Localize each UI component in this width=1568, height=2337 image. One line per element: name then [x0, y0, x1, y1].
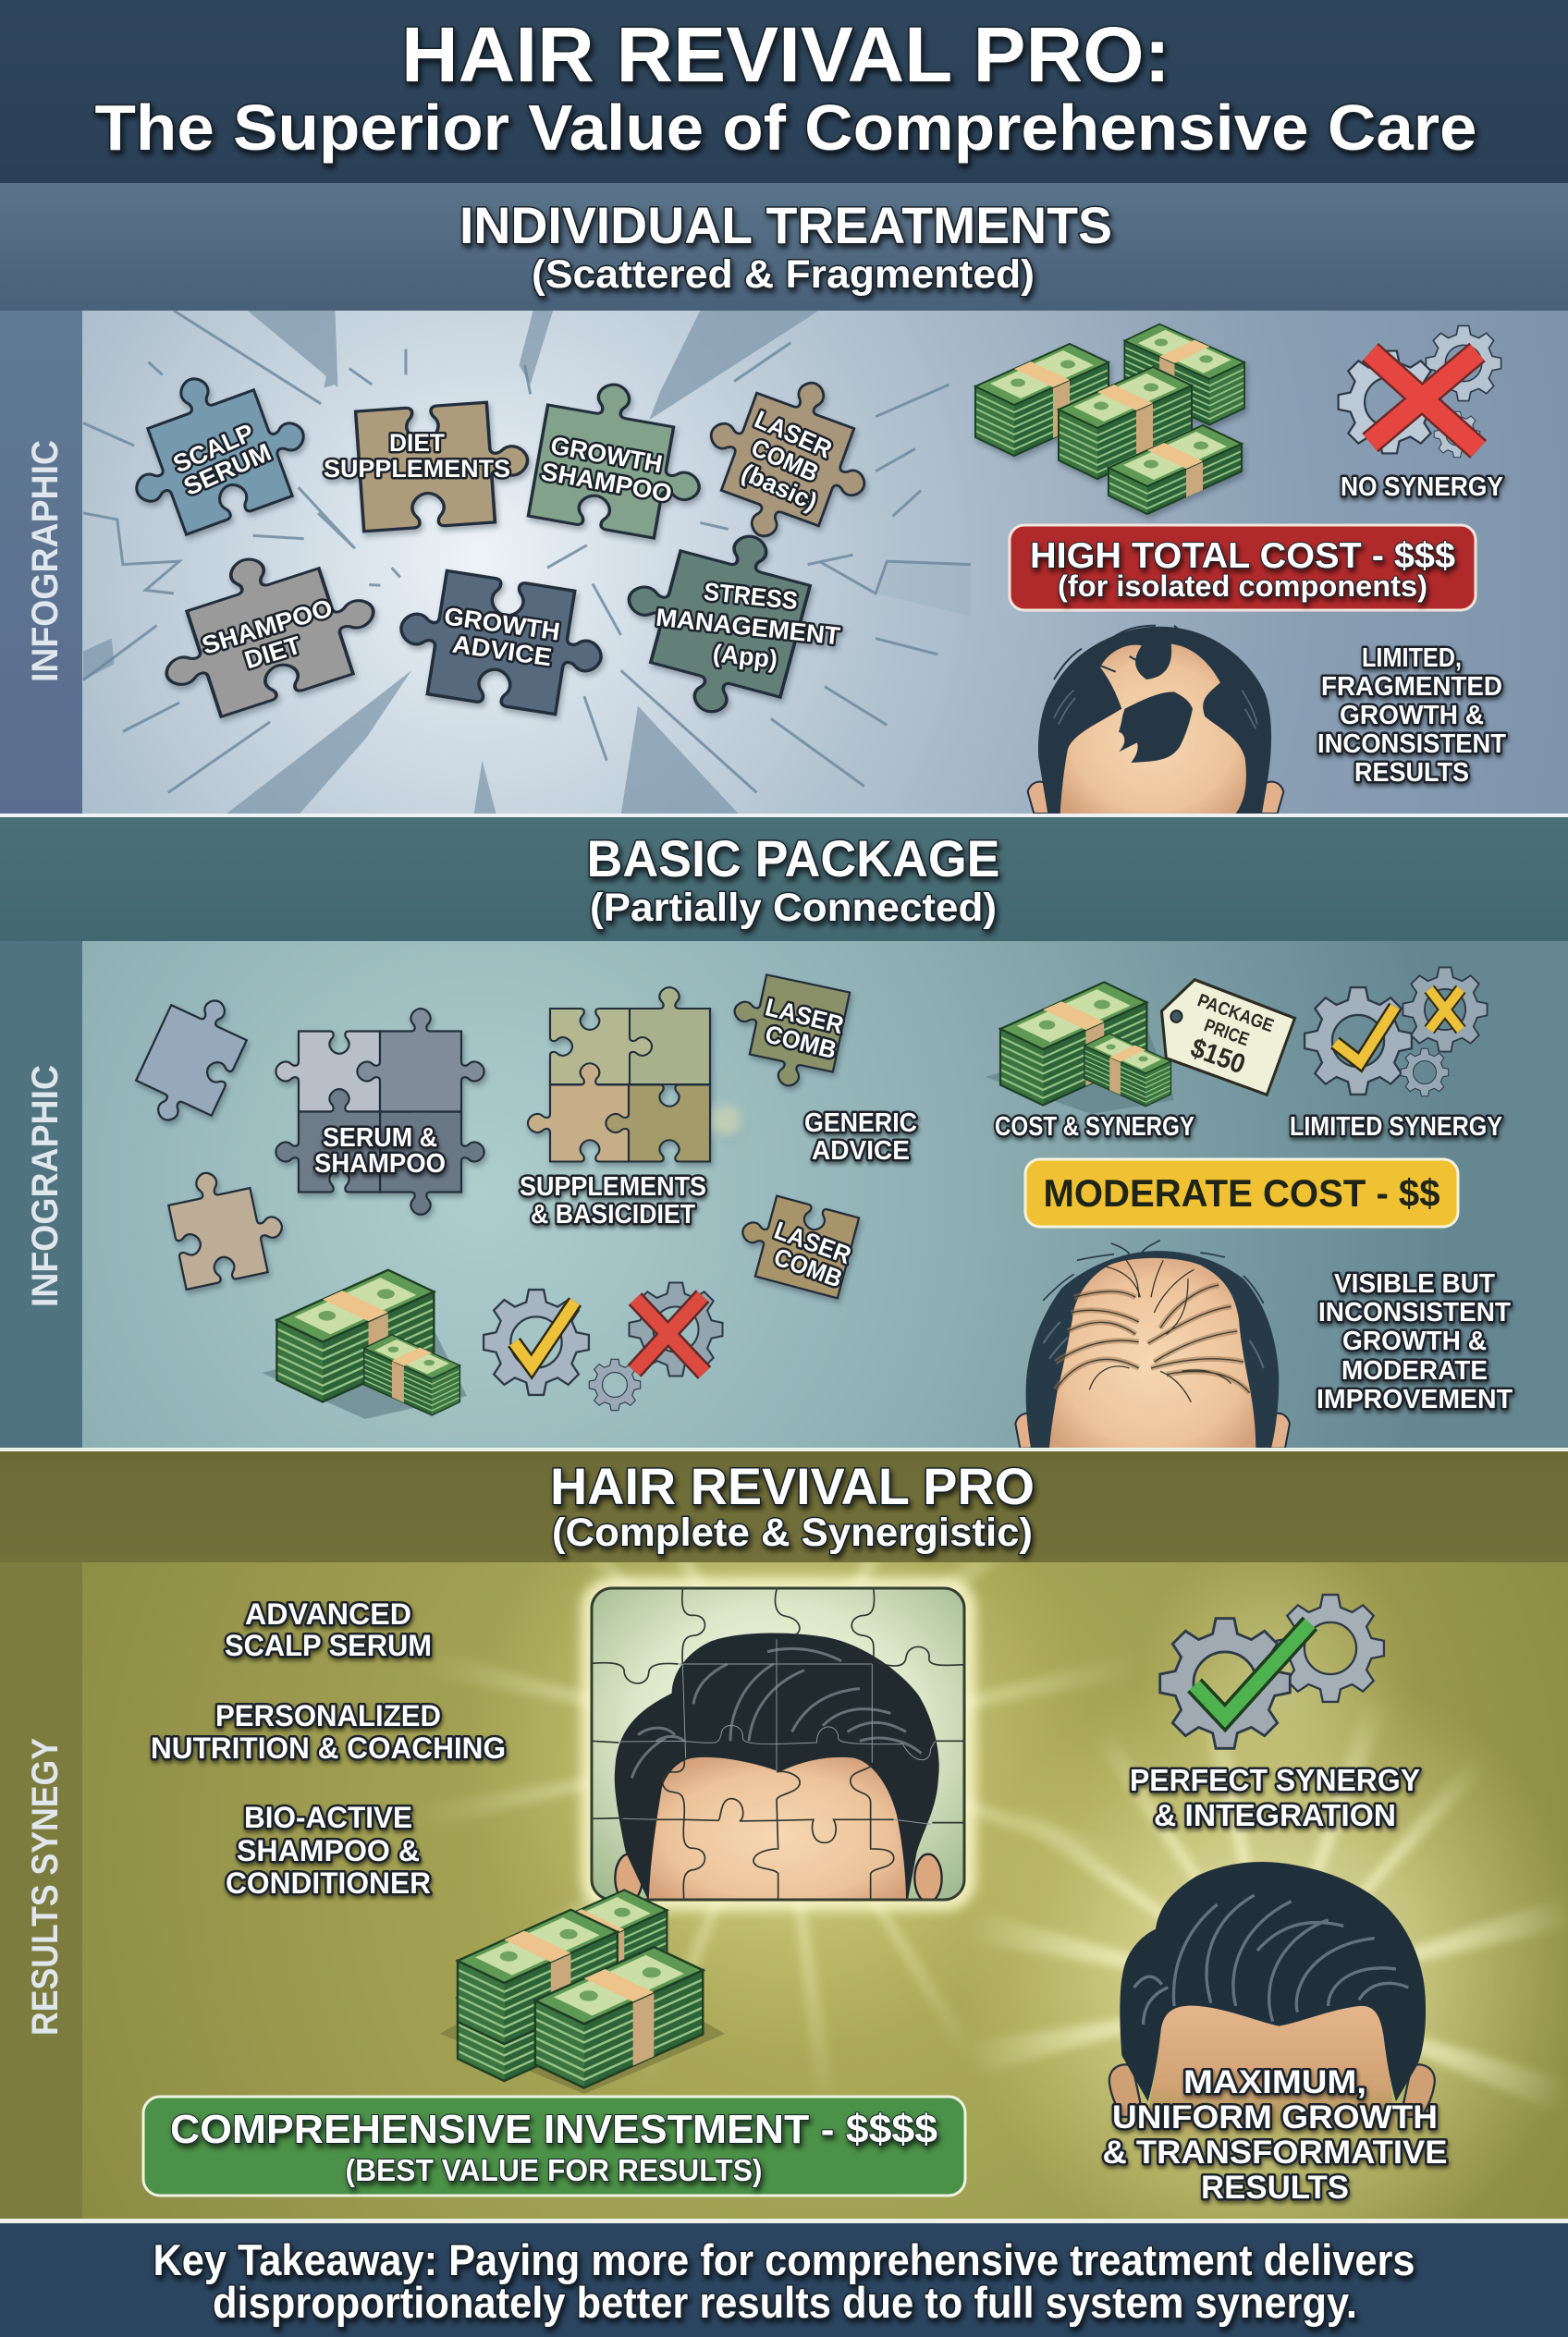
puzzle piece: laser comb: LASER	[751, 405, 836, 464]
icon: money with price tag	[986, 973, 1295, 1114]
puzzle piece: laser comb lower	[732, 1190, 859, 1298]
puzzle piece: diet supplements	[324, 399, 532, 532]
connected puzzle: serum and shampoo	[276, 1009, 484, 1215]
text: component list: BIO-ACTIVE	[244, 1801, 412, 1834]
text: visible but inconsistent: INCONSISTENT	[1318, 1298, 1511, 1328]
section heading: individual treatments	[0, 183, 1568, 311]
illustration: full hair head	[1109, 1862, 1435, 2147]
main title: HAIR REVIVAL PRO:	[401, 11, 1170, 98]
puzzle piece: laser comb lower: COMB	[770, 1242, 846, 1293]
price tag: PACKAGE	[1194, 990, 1277, 1036]
label: supplements and basic diet	[520, 1172, 706, 1230]
puzzle piece: growth advice: ADVICE	[450, 630, 554, 671]
panel: hair revival pro	[0, 1451, 1568, 2219]
footer: key takeaway: Key Takeaway: Paying more for comprehensive treatment delivers	[153, 2235, 1415, 2284]
icon: gears check and x	[484, 1283, 722, 1411]
text: component list: SHAMPOO &	[237, 1834, 420, 1867]
side label: INFOGRAPHIC	[25, 1065, 66, 1307]
callout: moderate cost	[1025, 1159, 1458, 1227]
text: maximum uniform growth: & TRANSFORMATIVE	[1102, 2135, 1448, 2171]
section heading: individual treatments: (Scattered & Fragmented)	[532, 252, 1035, 297]
text: maximum uniform growth: RESULTS	[1201, 2170, 1349, 2206]
price tag: $150	[1187, 1033, 1249, 1081]
puzzle piece: laser comb top: LASER	[763, 993, 847, 1039]
connected puzzle: serum and shampoo: SERUM &	[323, 1123, 437, 1153]
text: limited fragmented growth: INCONSISTENT	[1317, 729, 1506, 759]
text: maximum uniform growth: UNIFORM GROWTH	[1112, 2099, 1438, 2135]
panel: basic package	[0, 817, 1568, 1449]
shattered cracks background	[83, 311, 971, 815]
puzzle piece: scalp serum: SCALP	[169, 419, 258, 478]
price tag: PRICE	[1201, 1015, 1252, 1050]
puzzle piece: shampoo diet: SHAMPOO	[199, 593, 336, 660]
side label	[0, 311, 82, 814]
illustration: head with thinning hair	[1015, 1241, 1290, 1449]
text: perfect synergy: PERFECT SYNERGY	[1130, 1763, 1420, 1797]
subtitle: The Superior Value of Comprehensive Care	[94, 92, 1477, 164]
callout: comprehensive investment: (BEST VALUE FOR RESULTS)	[346, 2153, 762, 2187]
illustration: complete puzzle head tile	[581, 1577, 976, 1911]
label: supplements and basic diet: SUPPLEMENTS	[520, 1172, 706, 1202]
text: limited fragmented growth: GROWTH &	[1340, 701, 1484, 730]
text: maximum uniform growth: MAXIMUM,	[1183, 2064, 1366, 2100]
puzzle piece: laser comb top	[722, 970, 850, 1095]
icon: money stacks	[440, 1890, 725, 2094]
puzzle piece: diet supplements: SUPPLEMENTS	[324, 455, 510, 483]
puzzle piece: laser comb	[684, 356, 891, 563]
puzzle piece: growth shampoo	[528, 373, 715, 544]
side label	[0, 1562, 82, 2219]
puzzle piece: stress management: STRESS	[703, 578, 799, 615]
icon: money stacks	[975, 324, 1244, 514]
label: supplements and basic diet: & BASICIDIET	[531, 1200, 695, 1230]
loose puzzle piece: beige	[164, 1159, 290, 1290]
icon: gears with red x	[1339, 325, 1501, 458]
footer: key takeaway	[0, 2223, 1568, 2337]
puzzle piece: scalp serum	[107, 349, 322, 545]
puzzle piece: shampoo diet	[141, 527, 390, 728]
callout: comprehensive investment: COMPREHENSIVE INVESTMENT - $$$$	[170, 2107, 937, 2152]
callout: moderate cost: MODERATE COST - $$	[1043, 1171, 1440, 1215]
label: generic advice: ADVICE	[812, 1136, 910, 1166]
puzzle piece: laser comb lower: LASER	[771, 1217, 855, 1269]
illustration: head with patchy hair	[1028, 626, 1283, 814]
text: maximum uniform growth	[1102, 2064, 1448, 2206]
section heading: hair revival pro	[0, 1451, 1568, 1562]
puzzle piece: stress management: (App)	[712, 639, 778, 674]
puzzle piece: growth shampoo: GROWTH	[548, 432, 665, 478]
text: component list: NUTRITION & COACHING	[151, 1731, 506, 1765]
puzzle piece: scalp serum: SERUM	[179, 438, 276, 501]
puzzle piece: growth advice	[392, 565, 610, 720]
background glow rays	[447, 1562, 1566, 2219]
puzzle piece: stress management	[606, 510, 842, 728]
price tag	[1147, 973, 1295, 1095]
icon: limited synergy gears	[1305, 967, 1488, 1096]
puzzle piece: laser comb top: COMB	[763, 1020, 839, 1064]
callout: high total cost: HIGH TOTAL COST - $$$	[1030, 536, 1455, 576]
section heading: individual treatments: INDIVIDUAL TREATMENTS	[459, 196, 1112, 254]
icon: perfect synergy gears	[1160, 1595, 1384, 1748]
text: component list: PERSONALIZED	[215, 1699, 441, 1732]
callout: high total cost: (for isolated components)	[1058, 569, 1427, 603]
text: visible but inconsistent: GROWTH &	[1342, 1327, 1487, 1356]
section heading: hair revival pro: HAIR REVIVAL PRO	[550, 1457, 1035, 1515]
text: component list	[151, 1597, 506, 1900]
section heading: basic package: BASIC PACKAGE	[586, 829, 1000, 887]
text: component list: CONDITIONER	[226, 1866, 431, 1900]
side label: RESULTS SYNEGY	[25, 1738, 66, 2036]
text: limited fragmented growth	[1317, 643, 1506, 788]
text: perfect synergy	[1130, 1763, 1420, 1832]
puzzle piece: growth advice: GROWTH	[443, 602, 561, 646]
side label	[0, 941, 82, 1448]
connected puzzle: supplements	[528, 987, 741, 1161]
connected puzzle: serum and shampoo: SHAMPOO	[314, 1149, 446, 1179]
callout: high total cost	[1010, 525, 1476, 610]
label: cost and synergy: COST & SYNERGY	[995, 1112, 1194, 1142]
text: component list: SCALP SERUM	[225, 1629, 432, 1662]
text: visible but inconsistent: MODERATE	[1341, 1356, 1488, 1386]
label: generic advice	[804, 1108, 917, 1166]
icon: money lower	[262, 1270, 467, 1419]
loose puzzle piece: blue	[127, 984, 256, 1137]
text: visible but inconsistent	[1317, 1269, 1513, 1414]
section heading: basic package	[0, 817, 1568, 941]
side label: INFOGRAPHIC	[25, 440, 66, 682]
puzzle piece: stress management: MANAGEMENT	[655, 604, 842, 650]
footer: key takeaway: disproportionately better results due to full system synergy.	[213, 2278, 1357, 2327]
panel: individual treatments	[0, 183, 1568, 815]
puzzle piece: laser comb: (basic)	[738, 459, 821, 516]
text: limited fragmented growth: RESULTS	[1354, 758, 1469, 788]
section heading: hair revival pro: (Complete & Synergistic)	[552, 1511, 1033, 1555]
label: no synergy: NO SYNERGY	[1341, 472, 1503, 502]
text: perfect synergy: & INTEGRATION	[1154, 1798, 1396, 1832]
text: limited fragmented growth: FRAGMENTED	[1321, 672, 1502, 702]
text: limited fragmented growth: LIMITED,	[1362, 643, 1462, 673]
text: component list: ADVANCED	[245, 1597, 411, 1631]
puzzle piece: growth shampoo: SHAMPOO	[539, 458, 674, 508]
puzzle piece: shampoo diet: DIET	[241, 630, 305, 674]
section heading: basic package: (Partially Connected)	[590, 886, 997, 930]
text: visible but inconsistent: IMPROVEMENT	[1317, 1385, 1513, 1414]
label: generic advice: GENERIC	[804, 1108, 917, 1138]
puzzle piece: laser comb: COMB	[747, 434, 823, 487]
puzzle piece: diet supplements: DIET	[389, 429, 445, 457]
callout: comprehensive investment	[143, 2097, 965, 2196]
title band	[0, 0, 1568, 183]
text: visible but inconsistent: VISIBLE BUT	[1334, 1269, 1495, 1299]
label: limited synergy: LIMITED SYNERGY	[1290, 1112, 1502, 1142]
